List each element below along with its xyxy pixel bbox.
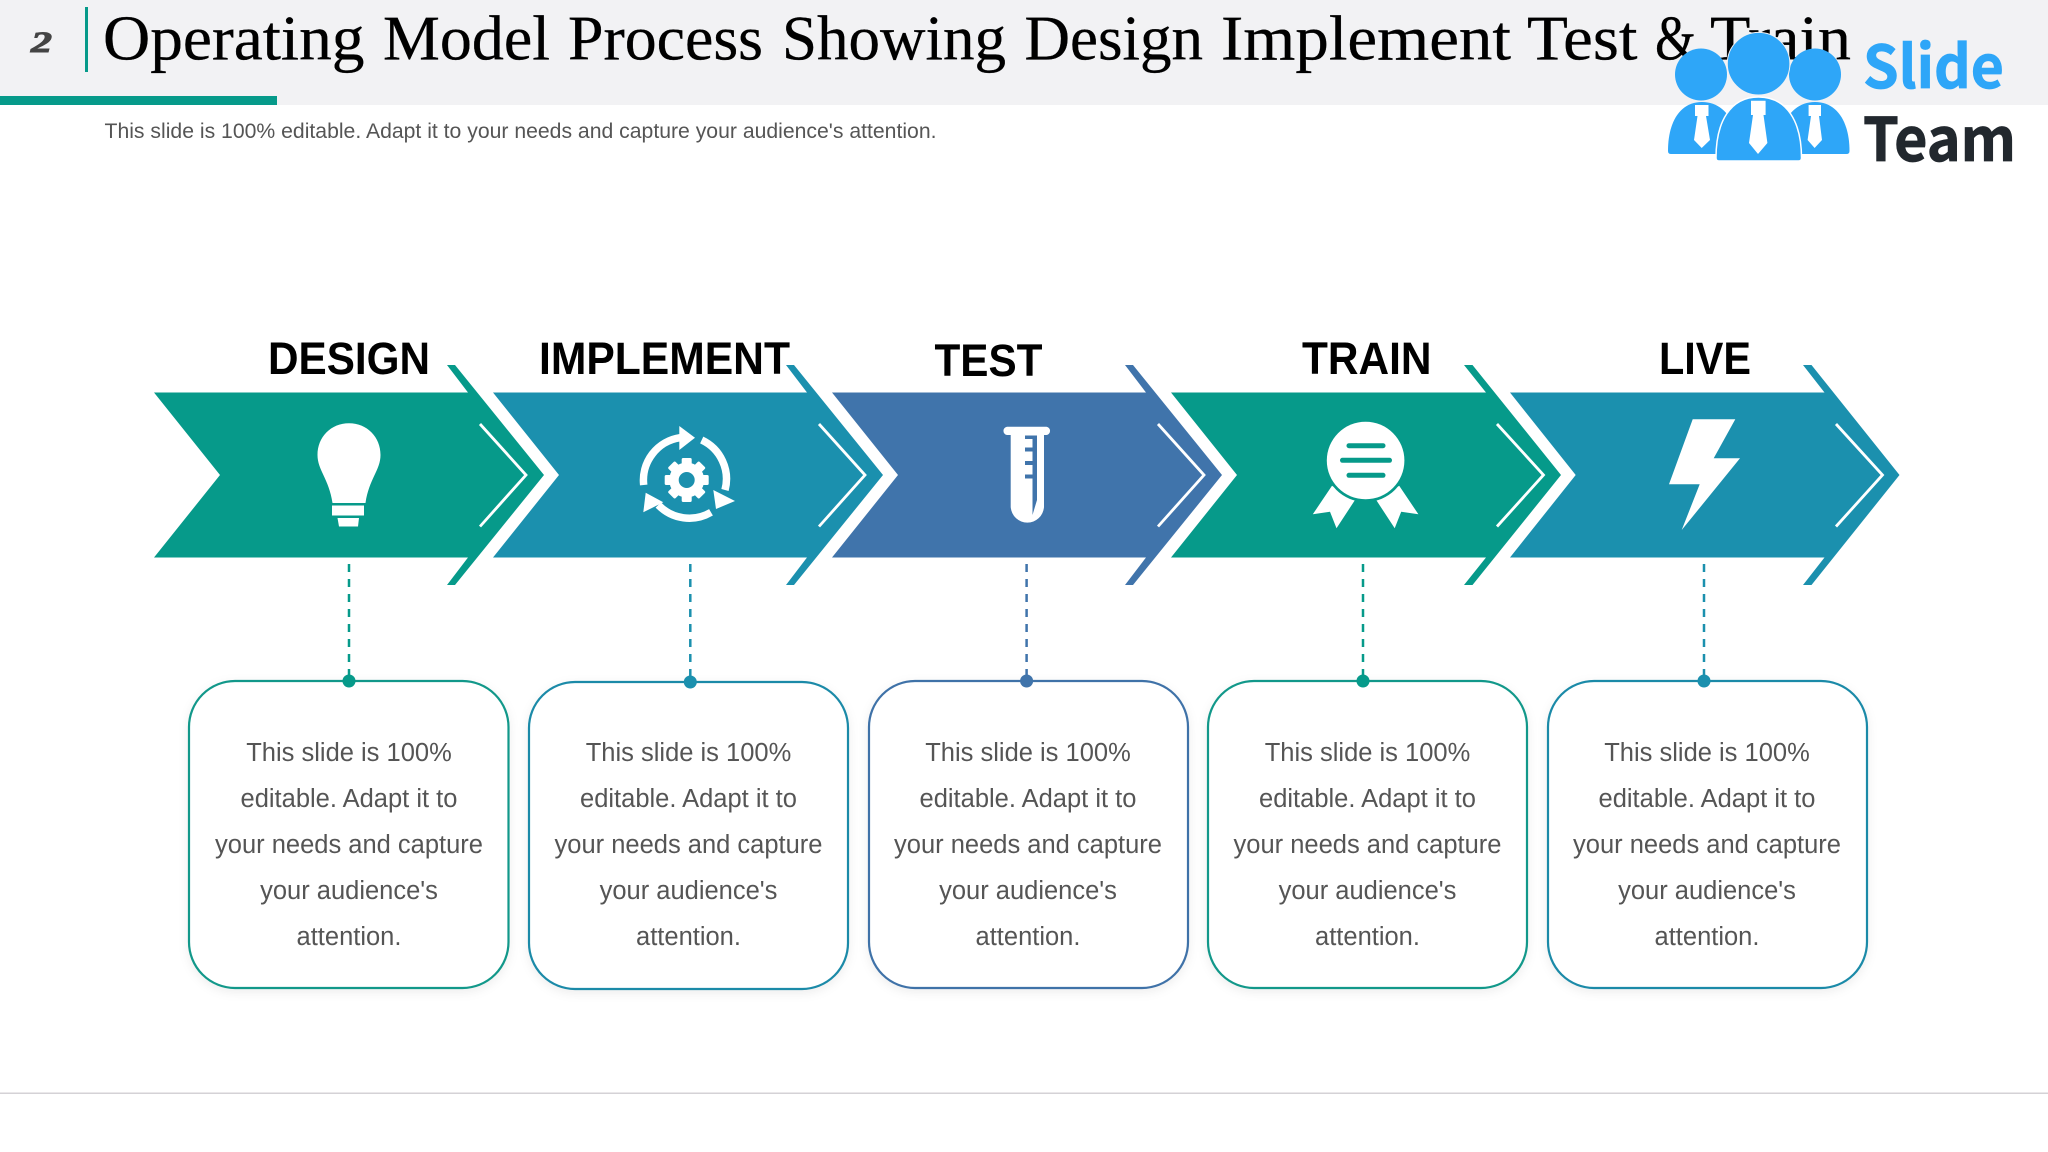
title: Process — [568, 4, 763, 74]
title: Implement — [1221, 4, 1512, 74]
arrow: design — [154, 365, 544, 585]
step 2: implement — [493, 333, 883, 585]
inner chevron — [480, 424, 526, 526]
body text: your needs and capture — [215, 831, 483, 859]
connector dot — [1020, 674, 1033, 688]
body text: your needs and capture — [1234, 831, 1501, 859]
body text: This slide is 100% — [1265, 739, 1470, 767]
title: & — [1655, 4, 1696, 74]
body text: editable. Adapt it to — [920, 785, 1136, 813]
body text: attention. — [1315, 923, 1420, 951]
title: Train — [1710, 4, 1851, 74]
logo word Slide: Slide — [1863, 20, 2004, 105]
inner chevron — [819, 424, 865, 526]
connector dot — [1698, 674, 1710, 688]
title: Operating — [103, 4, 364, 74]
title: Test — [1527, 4, 1638, 74]
body text: This slide is 100% — [1604, 739, 1810, 767]
logo: SlideTeam — [1668, 20, 2016, 179]
title: Model — [383, 4, 550, 74]
header band — [0, 0, 2048, 105]
icon: award badge — [1313, 419, 1418, 528]
arrow: implement — [493, 365, 883, 585]
connector: test — [1025, 564, 1028, 681]
step 4: train — [1171, 333, 1561, 585]
title: Design — [1024, 4, 1203, 74]
connector: implement — [689, 564, 692, 682]
body text: This slide is 100% — [246, 739, 452, 767]
icon: lightning bolt — [1669, 419, 1740, 530]
body text: your audience's — [1279, 877, 1456, 905]
panel: design description — [189, 674, 508, 988]
arrow: train — [1171, 365, 1561, 585]
logo people icon — [1668, 32, 1850, 161]
body text: your needs and capture — [555, 831, 822, 859]
panel: test description — [869, 674, 1188, 988]
panel: train description — [1208, 674, 1527, 988]
body text: editable. Adapt it to — [1259, 785, 1476, 813]
connector dot — [1356, 674, 1370, 688]
connector: design — [348, 564, 350, 681]
arrow: live — [1510, 365, 1900, 585]
body text: your audience's — [260, 877, 438, 905]
inner chevron — [1836, 424, 1882, 526]
body text: your audience's — [600, 877, 777, 905]
body text: attention. — [976, 923, 1080, 951]
panel: implement description — [529, 676, 848, 989]
body text: This slide is 100% — [925, 739, 1131, 767]
body text: your needs and capture — [1573, 831, 1841, 859]
heading: live: LIVE — [1659, 333, 1751, 384]
body text: your needs and capture — [894, 831, 1162, 859]
body text: editable. Adapt it to — [241, 785, 457, 813]
body text: attention. — [636, 923, 741, 951]
body text: attention. — [1655, 923, 1759, 951]
logo word Team: Team — [1863, 92, 2016, 179]
body text: This slide is 100% — [586, 739, 791, 767]
step 3: test — [832, 335, 1222, 585]
connector: train — [1362, 564, 1364, 681]
step 5: live — [1510, 333, 1900, 585]
title accent bar — [85, 7, 88, 72]
connector: live — [1703, 564, 1705, 681]
step 1: design — [154, 333, 544, 585]
body text: editable. Adapt it to — [1599, 785, 1815, 813]
icon: light bulb — [318, 423, 380, 526]
arrow: test — [832, 365, 1222, 585]
body text: attention. — [297, 923, 401, 951]
subtitle: This slide is 100% editable. Adapt it to your needs and capture your audience's attention. — [104, 120, 936, 143]
heading: train: TRAIN — [1302, 333, 1432, 384]
body text: your audience's — [939, 877, 1117, 905]
connector dot — [684, 676, 697, 688]
connector dot — [342, 674, 356, 688]
heading: test: TEST — [934, 335, 1042, 386]
panel: live description — [1548, 674, 1867, 988]
slide number: 2 — [30, 26, 52, 59]
inner chevron — [1158, 424, 1204, 526]
heading: design: DESIGN — [268, 333, 430, 384]
body text: editable. Adapt it to — [580, 785, 797, 813]
body text: your audience's — [1618, 877, 1796, 905]
icon: gear with cycle arrows — [643, 426, 735, 518]
heading: implement: IMPLEMENT — [539, 333, 790, 384]
icon: test tube — [1003, 427, 1050, 523]
title: Showing — [782, 4, 1006, 74]
inner chevron — [1497, 424, 1544, 526]
